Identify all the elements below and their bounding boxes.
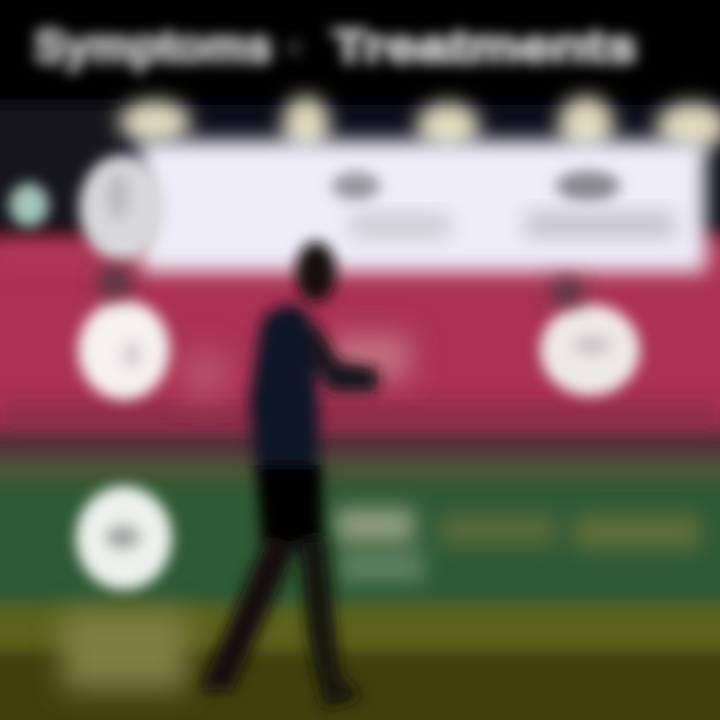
title: Symptoms (34, 20, 272, 72)
banner text block right (525, 212, 675, 238)
figure leg left (200, 535, 298, 690)
title: Treatments (332, 20, 637, 72)
figure torso (250, 305, 318, 470)
middle right circle (540, 304, 640, 396)
title: + (284, 27, 305, 68)
figure head (296, 242, 336, 302)
white banner panel (140, 140, 706, 272)
icon: small teal circle (9, 183, 49, 227)
lower left text block (62, 612, 187, 690)
connector stubs (100, 268, 582, 304)
figure shorts (256, 465, 322, 545)
red band pale text (180, 335, 410, 400)
green field text blocks (336, 508, 700, 582)
red band dark seat streaks (0, 250, 720, 427)
figure arm (305, 320, 378, 392)
figure leg right (298, 535, 362, 708)
banner text block centre (350, 214, 450, 238)
lower left circle (76, 486, 172, 590)
icon: banner grey mark centre (332, 172, 380, 200)
middle left circle (78, 300, 170, 400)
top left circle (79, 155, 165, 261)
title (34, 20, 637, 72)
icon: banner grey mark right (556, 171, 620, 201)
silhouette: walking figure (200, 242, 378, 708)
stadium lights row (119, 96, 720, 152)
